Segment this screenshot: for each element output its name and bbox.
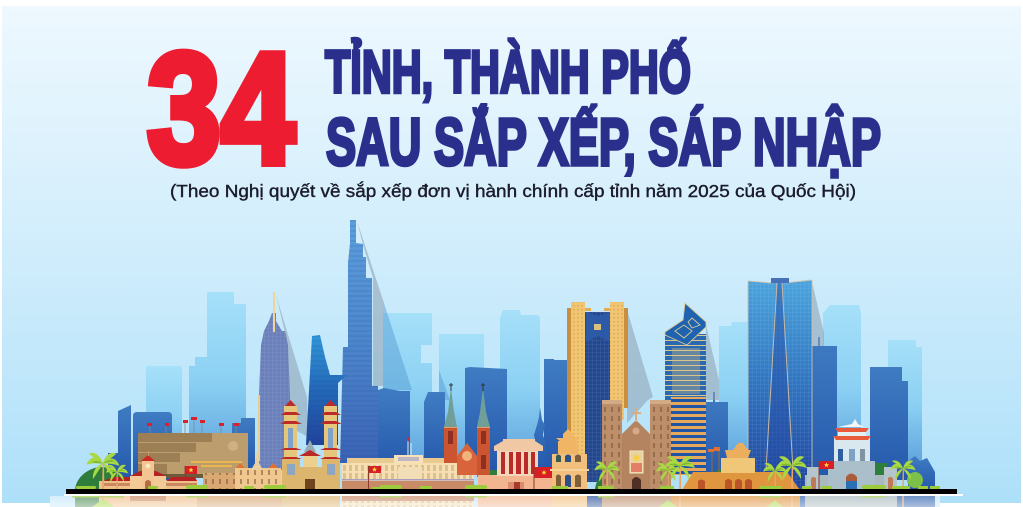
flag at hall [185, 466, 197, 490]
tower: gold twin tower [567, 302, 628, 482]
Hanoi flag tower [682, 443, 800, 490]
shrubs along the base [76, 485, 940, 489]
subtitle: (Theo Nghị quyết về sắp xếp đơn vị hành chính cấp tỉnh năm 2025 của Quốc Hội) [170, 180, 856, 201]
tower: tall blue glass building [748, 278, 812, 490]
city skyline illustration [75, 220, 940, 490]
Hanoi cathedral [602, 400, 671, 490]
city hall [203, 450, 281, 490]
mid blue buildings [108, 337, 935, 490]
foreground landmarks [75, 383, 940, 490]
Ho Chi Minh mausoleum [478, 439, 552, 490]
ground black bar [66, 489, 957, 494]
heading line 1: TỈNH, THÀNH PHỐ [325, 38, 691, 106]
palm trees [86, 453, 916, 490]
tower: Landmark 81 [340, 220, 378, 463]
tower: faceted blue building [665, 303, 706, 475]
Independence Palace [342, 437, 474, 490]
tower: Vincom spire [258, 292, 290, 470]
ground white line [64, 494, 963, 496]
water reflection [50, 496, 940, 507]
flag at mausoleum [534, 467, 554, 490]
pale background buildings [146, 292, 922, 470]
hall building [138, 417, 248, 478]
big number 34: 34 [147, 21, 295, 197]
Ben Thanh market [99, 451, 197, 490]
Temple of Literature gate [805, 419, 897, 489]
Cao Dai temple [280, 400, 342, 490]
grey shadows of towers [276, 221, 824, 437]
green hills [75, 463, 923, 490]
tower shadow on pale buildings [383, 300, 450, 400]
colonial post building [550, 429, 589, 490]
flag at temple [818, 461, 834, 489]
tower: Bitexco [306, 335, 347, 445]
Notre Dame cathedral [444, 383, 490, 477]
